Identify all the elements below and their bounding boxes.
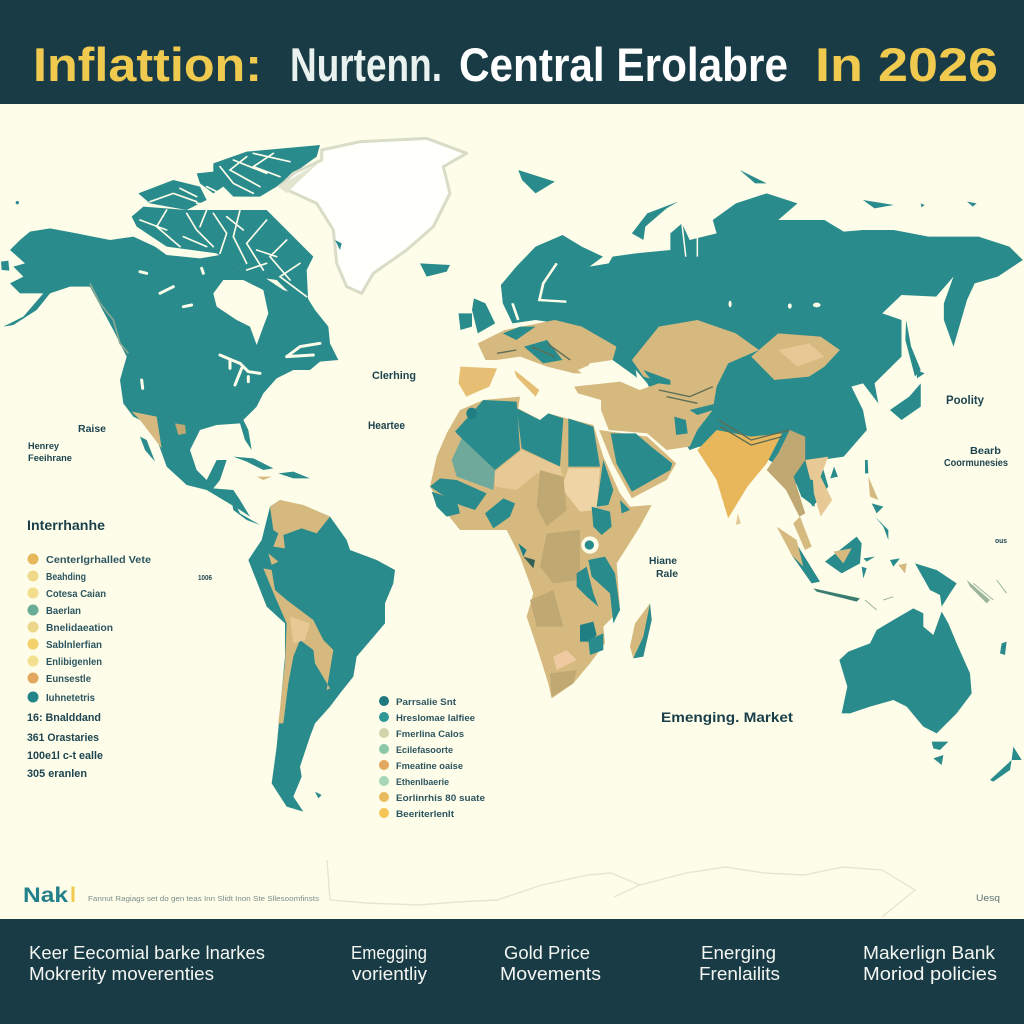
legend: centre: Hreslomae Ialfiee	[396, 713, 475, 724]
label: Clerhing: Clerhing	[372, 370, 416, 382]
legend items: Cotesa Caian	[46, 588, 106, 600]
legend: centre: Beeriterlenlt	[396, 809, 455, 820]
legend items: Iuhnetetris	[46, 692, 95, 704]
label: Poolity: Poolity	[946, 393, 984, 407]
legend: centre: Fmeatine oaise	[396, 761, 463, 772]
arctic channels	[140, 153, 307, 297]
Eurasia	[459, 170, 1023, 525]
legend items: Centerlgrhalled Vete	[46, 554, 151, 566]
Turkey, Iran, Middle East	[574, 382, 717, 450]
legend heading: Interrhanhe	[27, 517, 105, 533]
Greenland	[278, 138, 467, 293]
great lakes and gulf	[140, 268, 320, 388]
footer band	[0, 919, 1024, 1024]
Mongolia	[751, 333, 840, 380]
world map	[1, 138, 1023, 917]
Southeast Asia	[767, 430, 805, 517]
legend items: Bnelidaeation	[46, 622, 113, 634]
title: Inflattion:	[33, 38, 262, 91]
logo: Nak	[23, 884, 68, 907]
label: ous: ous	[995, 538, 1007, 545]
title: Central Erolabre	[459, 38, 788, 91]
caribbean	[233, 457, 273, 470]
legend: centre: Ethenlbaerie	[396, 777, 449, 788]
arctic russian islands	[459, 170, 977, 478]
black sea	[578, 363, 616, 378]
footer item 4: Frenlailits	[699, 964, 780, 984]
label: Bearb Coormunesies: Coormunesies	[944, 458, 1008, 469]
title: In 2026	[815, 38, 998, 91]
legend statistics: 305 eranlen	[27, 768, 87, 780]
Madagascar	[630, 603, 652, 658]
legend statistics: 100e1l c-t ealle	[27, 750, 103, 762]
footer item 3	[500, 943, 601, 984]
Africa	[430, 397, 652, 698]
legend: centre: Parrsalie Snt	[396, 697, 457, 708]
label: Henrey Feeihrane: Henrey	[28, 441, 60, 452]
label: Heartee: Heartee	[368, 420, 405, 432]
label: Emenging Market: Emenging. Market	[661, 709, 793, 725]
label: Raise: Raise	[78, 424, 106, 435]
legend statistics	[27, 712, 103, 780]
arctic islands	[1, 145, 450, 303]
label: Hiane Rale: Rale	[656, 569, 678, 580]
footer item 5: Moriod policies	[863, 964, 997, 984]
legend items: Enlibigenlen	[46, 656, 102, 668]
legend statistics: 361 Orastaries	[27, 732, 99, 744]
footer item 1: Mokrerity moverenties	[29, 964, 214, 984]
label: Bearb Coormunesies: Bearb	[970, 446, 1001, 457]
footer item 4: Energing	[701, 943, 776, 963]
hudson bay	[213, 280, 268, 345]
Australia and Oceania	[777, 460, 1022, 782]
footer item 2	[351, 943, 427, 984]
legend items: Sablnlerfian	[46, 639, 102, 651]
footer item 3: Gold Price	[504, 943, 590, 963]
legend items: Baerlan	[46, 605, 81, 617]
label: Hiane Rale: Hiane	[649, 556, 677, 567]
legend: centre: Ecilefasoorte	[396, 745, 453, 756]
title: Nurtenn.	[290, 38, 442, 91]
Arabia	[599, 430, 676, 498]
legend items: Beahding	[46, 571, 86, 583]
footer item 5: Makerlign Bank	[863, 943, 996, 963]
legend: centre: Eorlinrhis 80 suate	[396, 793, 485, 804]
header band	[0, 0, 1024, 104]
South America	[230, 493, 395, 812]
footer item 2: Emegging	[351, 943, 427, 963]
Central Asia	[632, 320, 759, 403]
label: Henrey Feeihrane	[28, 441, 72, 464]
Antarctica outline	[327, 860, 915, 917]
corner note: Uesq	[976, 893, 1000, 903]
legend items: Eunsestle	[46, 673, 91, 685]
legend: centre	[379, 696, 485, 820]
footer item 1	[29, 943, 265, 984]
legend: left	[27, 517, 151, 780]
Himalayan detail	[497, 343, 790, 445]
label: Bearb Coormunesies	[944, 446, 1008, 469]
inland lakes	[729, 301, 821, 309]
footer item 2: vorientliy	[352, 964, 427, 984]
legend items	[28, 554, 151, 704]
baja and southwest	[132, 412, 162, 448]
legend statistics: 16: Bnalddand	[27, 712, 101, 724]
label: 1006: 1006	[198, 575, 212, 582]
footer item 4	[699, 943, 780, 984]
label: Henrey Feeihrane: Feeihrane	[28, 453, 72, 464]
map labels	[28, 370, 1008, 725]
Europe	[478, 320, 616, 373]
India	[697, 430, 782, 518]
label: Hiane Rale	[649, 556, 678, 580]
footer item 3: Movements	[500, 964, 601, 984]
footer item 5	[863, 943, 997, 984]
baltic	[512, 263, 566, 320]
footer item 1: Keer Eecomial barke lnarkes	[29, 943, 265, 963]
North America	[1, 145, 450, 517]
legend: centre: Fmerlina Calos	[396, 729, 464, 740]
logo: l	[70, 884, 76, 907]
source note: Fannut Ragiags set do gen teas Inn Slidt Inon Ste Sllesoomfinsts	[88, 896, 320, 903]
title	[33, 38, 998, 91]
